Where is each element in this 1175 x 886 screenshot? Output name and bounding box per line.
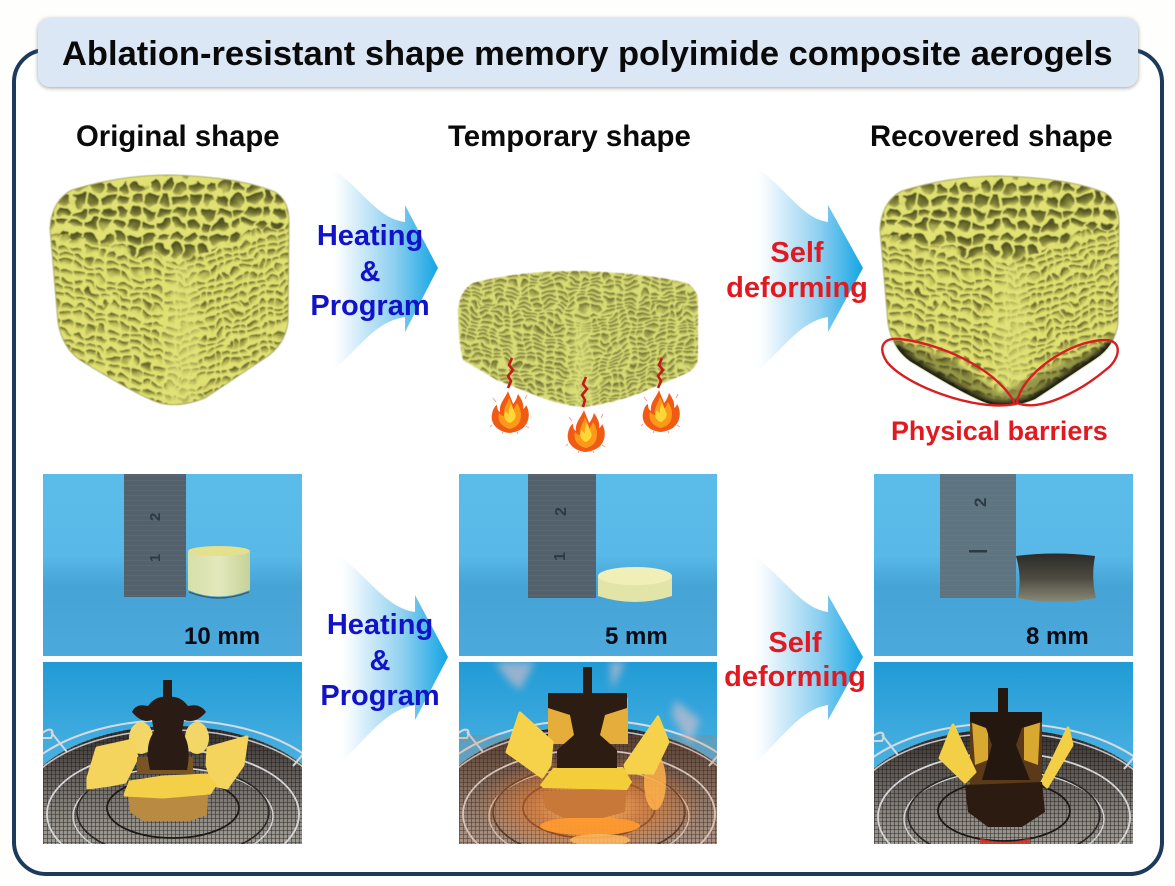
- arrow: heating and program, bottom: [320, 553, 448, 768]
- arrow: self deforming, top: deforming: [726, 272, 868, 304]
- arrow: heating and program, bottom: &: [370, 645, 391, 677]
- ruler: 1: [147, 554, 164, 562]
- arrow: heating and program, top: Program: [310, 290, 430, 322]
- arrow: heating and program, bottom: Program: [320, 680, 440, 712]
- label: 5 mm: 5 mm: [605, 623, 668, 650]
- ruler: 2: [553, 507, 570, 516]
- ruler: 2: [147, 513, 164, 521]
- label: 8 mm: 8 mm: [1026, 623, 1089, 650]
- photo: recovered sample on rack: [874, 662, 1133, 844]
- ruler: [940, 474, 1016, 598]
- charred sample: [1016, 554, 1096, 602]
- flame glow: [459, 662, 717, 856]
- photo: original sample on rack: [43, 662, 302, 844]
- arrow: self deforming, bottom: deforming: [724, 661, 866, 693]
- photo: recovered sample with ruler, 8 mm: [874, 474, 1133, 656]
- arrow: heating and program, top: &: [360, 256, 381, 288]
- ruler: [528, 474, 596, 598]
- foam cube: original shape: [20, 150, 320, 430]
- metal fixture: [548, 667, 627, 768]
- yellow flaps and charred block: [940, 712, 1072, 846]
- aerogel cylinder: [188, 546, 250, 598]
- icon: flame left: [490, 391, 529, 434]
- ruler: 1: [552, 552, 569, 561]
- ruler: 2: [971, 498, 990, 507]
- arrow: self deforming, bottom: [724, 553, 866, 768]
- yellow specimen: [88, 722, 247, 821]
- arrow: heating and program, bottom: Heating: [327, 609, 433, 641]
- arrow: self deforming, bottom: Self: [768, 627, 822, 659]
- photo: temporary sample on rack over flame: [459, 662, 717, 844]
- ruler: [124, 474, 186, 597]
- arrow: self deforming, top: Self: [770, 237, 824, 269]
- title bar: Ablation-resistant shape memory polyimide composite aerogels: [62, 35, 1113, 73]
- photo: temporary sample with ruler, 5 mm: [459, 474, 717, 656]
- callout: red outlines around physical barriers: [882, 339, 1118, 405]
- foam cube: recovered shape with charred edge: [878, 174, 1120, 407]
- column heading: temporary shape: Temporary shape: [448, 120, 691, 153]
- column heading: recovered shape: Recovered shape: [870, 120, 1113, 153]
- icon: flame centre: [566, 410, 605, 453]
- foam block: temporary compressed shape: [457, 270, 699, 408]
- arrow: heating and program, top: [310, 165, 438, 375]
- title bar: [38, 18, 1138, 87]
- yellow specimen: [507, 698, 668, 818]
- label: physical barriers: Physical barriers: [891, 416, 1108, 446]
- arrow: self deforming, top: [726, 165, 868, 375]
- aerogel disc: [598, 567, 672, 602]
- heat lines rising from flames: [508, 358, 663, 407]
- column heading: original shape: Original shape: [76, 120, 280, 153]
- icon: flame right: [641, 390, 680, 433]
- metal fixture: [970, 688, 1042, 780]
- metal fixture: [132, 680, 206, 770]
- photo: original sample with ruler, 10 mm: [43, 474, 302, 656]
- arrow: heating and program, top: Heating: [317, 220, 423, 252]
- label: 10 mm: 10 mm: [184, 623, 260, 650]
